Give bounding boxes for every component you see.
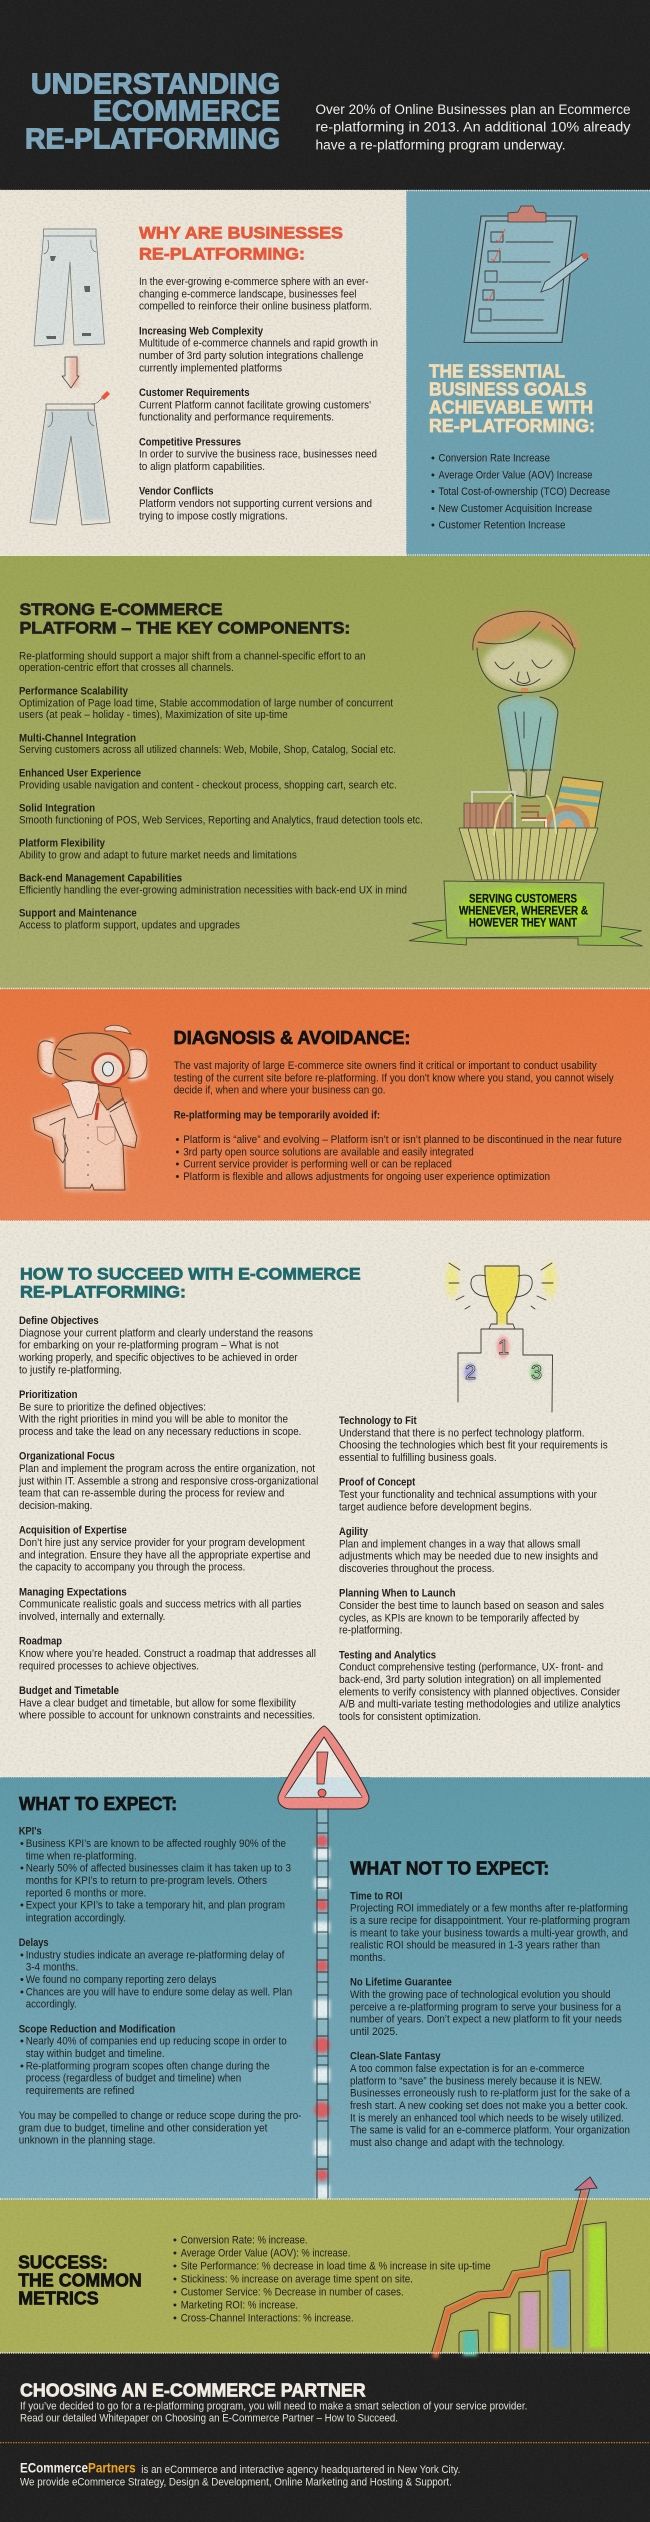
- heading: ACHIEVABLE WITH: [429, 398, 593, 418]
- intro text: re-platforming in 2013. An additional 10% already: [316, 120, 631, 135]
- text block: left column: Prioritization: [19, 1389, 78, 1401]
- text block: right column: essential to fulfilling business goals.: [339, 1452, 497, 1464]
- text block: right column: Technology to Fit: [339, 1415, 417, 1427]
- body: [498, 695, 558, 798]
- heading: [429, 361, 595, 436]
- list: metrics: [173, 2234, 491, 2324]
- text block: right column: Conduct comprehensive testing (performance, UX- front- and: [339, 1662, 603, 1674]
- text block: expectations: unknown in the planning stage.: [19, 2135, 155, 2147]
- text block: company: We provide eCommerce Strategy, Design & Development, Online Marketing and Hosting & Support.: [20, 2476, 452, 2488]
- text block: left column: working properly, and specific objectives to be achieved in order: [18, 1352, 298, 1364]
- basket items: [464, 777, 603, 828]
- icon: clipboard and pencil: [464, 206, 588, 342]
- text block: non-expectations: platform to “save” the business merely because it is NEW.: [350, 2075, 602, 2087]
- banner: [409, 881, 642, 946]
- title: RE-PLATFORMING: [25, 123, 280, 155]
- text block: expectations: •: [20, 1974, 24, 1986]
- text block: expectations: KPI's: [19, 1826, 42, 1838]
- text block: expectations: reported 6 months or more.: [26, 1887, 146, 1899]
- text block: left column: Plan and implement the program across the entire organization, not: [19, 1463, 315, 1475]
- list: business goals: •: [431, 486, 435, 498]
- text block: components: Support and Maintenance: [19, 908, 137, 920]
- text block: expectations: You may be compelled to change or reduce scope during the pro-: [19, 2110, 302, 2122]
- text block: reasons: Increasing Web Complexity: [139, 325, 264, 337]
- text block: components: Back-end Management Capabilities: [19, 873, 182, 885]
- text block: expectations: stay within budget and timeline.: [26, 2048, 165, 2060]
- text block: non-expectations: number of years. Don’t expect a new platform to fit your needs: [350, 2014, 622, 2026]
- text block: partner: If you’ve decided to go for a re-platforming program, you will need to make a smart selection of your service provider.: [20, 2400, 527, 2412]
- text block: left column: Diagnose your current platform and clearly understand the reasons: [19, 1327, 313, 1339]
- text block: diagnosis: decide if, when and where your business can go.: [174, 1085, 386, 1097]
- text block: reasons: Competitive Pressures: [139, 436, 241, 448]
- text block: non-expectations: [350, 1890, 631, 2149]
- text block: company: [20, 2460, 460, 2488]
- list: metrics: •: [173, 2234, 177, 2246]
- text block: right column: Plan and implement changes in a way that allows small: [339, 1538, 580, 1550]
- title: [25, 68, 280, 155]
- text block: expectations: •: [20, 2036, 24, 2048]
- text block: left column: and integration. Ensure they have all the appropriate expertise and: [19, 1549, 310, 1561]
- heading: STRONG E-COMMERCE: [20, 600, 223, 619]
- panel: what to expect: [0, 1777, 650, 2199]
- illustration: professor with magnifier: [33, 1025, 147, 1190]
- panel: header: [0, 0, 650, 190]
- list: business goals: •: [431, 469, 435, 481]
- list: metrics: Conversion Rate: % increase.: [181, 2234, 308, 2246]
- text block: right column: back-end, 3rd party solution integration) on all implemented: [339, 1674, 601, 1686]
- panel: footer: [0, 2353, 650, 2522]
- text block: expectations: •: [20, 1986, 24, 1998]
- list: metrics: •: [173, 2247, 177, 2259]
- text block: right column: Understand that there is no perfect technology platform.: [339, 1427, 584, 1439]
- list: business goals: Customer Retention Increase: [438, 520, 566, 532]
- text block: non-expectations: until 2025.: [350, 2026, 398, 2038]
- text block: expectations: Business KPI’s are known to be affected roughly 90% of the: [26, 1838, 286, 1850]
- text block: partner: Read our detailed Whitepaper on Choosing an E-Commerce Partner – How to Succeed.: [20, 2413, 398, 2425]
- list: metrics: •: [173, 2299, 177, 2311]
- basket: [459, 795, 598, 880]
- panel: how to succeed: [0, 1221, 650, 1777]
- heading: what not to expect: WHAT NOT TO EXPECT:: [350, 1859, 549, 1879]
- text block: components: Solid Integration: [19, 803, 95, 815]
- text block: left column: Define Objectives: [19, 1315, 99, 1327]
- text block: left column: the capacity to accompany you through the process.: [19, 1562, 245, 1574]
- text block: expectations: Industry studies indicate an average re-platforming delay of: [26, 1949, 285, 1961]
- text block: expectations: process (regardless of budget and timeline) when: [26, 2073, 241, 2085]
- heading: CHOOSING AN E-COMMERCE PARTNER: [20, 2381, 366, 2401]
- text block: expectations: Re-platforming program scopes often change during the: [26, 2060, 270, 2072]
- text block: left column: where possible to account for unknown constraints and necessities.: [18, 1710, 315, 1722]
- list: business goals: •: [431, 503, 435, 515]
- list: metrics: Customer Service: % Decrease in number of cases.: [181, 2286, 404, 2298]
- text block: expectations: gram due to budget, timeline and other consideration yet: [19, 2122, 267, 2134]
- heading: RE-PLATFORMING:: [139, 245, 305, 264]
- text block: expectations: requirements are refined: [26, 2085, 134, 2097]
- text block: components: Enhanced User Experience: [19, 768, 141, 780]
- text block: non-expectations: A too common false expectation is for an e-commerce: [350, 2063, 584, 2075]
- text block: expectations: time when re-platforming.: [26, 1850, 137, 1862]
- text block: expectations: 3-4 months.: [26, 1962, 78, 1974]
- heading: [139, 224, 343, 264]
- panel: essential business goals: [406, 190, 650, 556]
- list: metrics: Stickiness: % increase on average time spent on site.: [181, 2273, 413, 2285]
- text block: expectations: Nearly 50% of affected businesses claim it has taken up to 3: [26, 1863, 291, 1875]
- icon: torn jeans: [34, 229, 105, 346]
- text block: reasons: Current Platform cannot facilitate growing customers': [139, 399, 371, 411]
- text block: reasons: In order to survive the business race, businesses need: [139, 449, 377, 461]
- icon: repaired jeans: [30, 391, 110, 525]
- text block: diagnosis: Platform is flexible and allows adjustments for ongoing user experience optimization: [183, 1171, 550, 1183]
- text block: right column: Proof of Concept: [339, 1477, 416, 1489]
- banner: WHENEVER, WHEREVER &: [459, 906, 588, 918]
- text block: non-expectations: No Lifetime Guarantee: [350, 1977, 452, 1989]
- list: metrics: •: [173, 2286, 177, 2298]
- heading: HOW TO SUCCEED WITH E-COMMERCE: [20, 1264, 361, 1283]
- text block: right column: target audience before development begins.: [339, 1501, 532, 1513]
- text block: left column: Organizational Focus: [19, 1451, 115, 1463]
- list: business goals: Total Cost-of-ownership (TCO) Decrease: [438, 486, 610, 498]
- heading: [18, 2252, 142, 2308]
- text block: reasons: trying to impose costly migrations.: [139, 510, 288, 522]
- text block: right column: [339, 1415, 621, 1723]
- text block: left column: Have a clear budget and timetable, but allow for some flexibility: [19, 1697, 296, 1709]
- list: metrics: •: [173, 2273, 177, 2285]
- list: metrics: Average Order Value (AOV): % increase.: [181, 2247, 350, 2259]
- head: [472, 610, 580, 693]
- text block: left column: Know where you’re headed. Construct a roadmap that addresses all: [19, 1648, 316, 1660]
- text block: diagnosis: The vast majority of large E-commerce site owners find it critical or important to conduct usability: [174, 1060, 597, 1072]
- intro text: have a re-platforming program underway.: [316, 137, 566, 152]
- text block: right column: Choosing the technologies which best fit your requirements is: [339, 1440, 608, 1452]
- arrow: torn to fixed jeans: [62, 357, 79, 388]
- text block: expectations: Delays: [19, 1937, 48, 1949]
- list: metrics: •: [173, 2260, 177, 2272]
- text block: components: Providing usable navigation and content - checkout process, shopping cart, search etc.: [19, 779, 397, 791]
- text block: diagnosis: Re-platforming may be temporarily avoided if:: [174, 1109, 380, 1121]
- text block: components: Ability to grow and adapt to future market needs and limitations: [19, 849, 297, 861]
- text block: left column: process and take the lead on any necessary reductions in scope.: [19, 1426, 301, 1438]
- illustration: person with shopping basket: [409, 610, 642, 946]
- text block: non-expectations: Clean-Slate Fantasy: [350, 2051, 441, 2063]
- title: ECOMMERCE: [93, 96, 280, 128]
- text block: right column: adjustments which may be needed due to new insights and: [339, 1551, 598, 1563]
- title: UNDERSTANDING: [31, 68, 280, 100]
- text block: company: Partners: [88, 2460, 136, 2476]
- text block: expectations: •: [20, 1949, 24, 1961]
- heading: SUCCESS:: [18, 2252, 108, 2272]
- text block: expectations: Chances are you will have to endure some delay as well. Plan: [26, 1986, 292, 1998]
- text block: left column: [18, 1315, 318, 1722]
- text block: left column: Don’t hire just any service provider for your program development: [19, 1537, 305, 1549]
- intro text: [316, 102, 631, 152]
- text block: diagnosis: •: [176, 1134, 180, 1146]
- text block: left column: Managing Expectations: [19, 1586, 127, 1598]
- text block: diagnosis: [174, 1060, 622, 1183]
- text block: components: Efficiently handling the ever-growing administration necessities with back-end UX in mind: [19, 884, 407, 896]
- panel: diagnosis and avoidance: [0, 989, 650, 1221]
- panel: success metrics: [0, 2199, 650, 2353]
- text block: expectations: •: [20, 2060, 24, 2072]
- text block: reasons: number of 3rd party solution integrations challenge: [139, 350, 364, 362]
- text block: diagnosis: •: [176, 1146, 180, 1158]
- text block: right column: re-platforming.: [339, 1625, 402, 1637]
- list: metrics: Site Performance: % decrease in load time & % increase in site up-time: [181, 2260, 491, 2272]
- text block: left column: Acquisition of Expertise: [19, 1525, 127, 1537]
- text block: reasons: to align platform capabilities.: [139, 461, 265, 473]
- text block: left column: to justify re-platforming.: [19, 1364, 122, 1376]
- text block: right column: Test your functionality and technical assumptions with your: [339, 1489, 597, 1501]
- text block: components: Platform Flexibility: [19, 838, 106, 850]
- text block: components: Multi-Channel Integration: [19, 732, 136, 744]
- text block: reasons: functionality and performance requirements.: [139, 412, 334, 424]
- heading: THE ESSENTIAL: [429, 361, 565, 381]
- text block: right column: elements to verify consistency with planned objectives. Consider: [339, 1686, 620, 1698]
- heading: THE COMMON: [18, 2270, 142, 2290]
- icon: warning sign on post: [278, 1726, 369, 2199]
- heading: PLATFORM – THE KEY COMPONENTS:: [20, 618, 350, 637]
- text block: expectations: integration accordingly.: [26, 1912, 126, 1924]
- text block: diagnosis: 3rd party open source solutions are available and easily integrated: [183, 1146, 474, 1158]
- text block: diagnosis: •: [176, 1159, 180, 1171]
- text block: components: operation-centric effort that crosses all channels.: [19, 662, 234, 674]
- text block: diagnosis: Current service provider is performing well or can be replaced: [183, 1159, 452, 1171]
- heading: BUSINESS GOALS: [429, 380, 586, 400]
- text block: left column: just within IT. Assemble a strong and responsive cross-organizational: [18, 1475, 318, 1487]
- text block: non-expectations: fresh start. A new cooking set does not make you a better cook.: [350, 2100, 628, 2112]
- text block: left column: With the right priorities in mind you will be able to monitor the: [19, 1414, 288, 1426]
- text block: right column: Consider the best time to launch based on season and sales: [339, 1600, 604, 1612]
- text block: company: ECommerce: [20, 2460, 88, 2476]
- text block: right column: Agility: [339, 1526, 369, 1538]
- list: business goals: •: [431, 452, 435, 464]
- chart: rising bars and arrow: [430, 2177, 608, 2360]
- text block: reasons: Multitude of e-commerce channels and rapid growth in: [139, 338, 378, 350]
- text block: reasons: [139, 276, 378, 522]
- intro text: Over 20% of Online Businesses plan an Ecommerce: [316, 102, 630, 117]
- text block: non-expectations: realistic ROI should be measured in 1-3 years rather than: [350, 1940, 600, 1952]
- text block: left column: involved, internally and externally.: [19, 1611, 165, 1623]
- heading: RE-PLATFORMING:: [20, 1283, 186, 1302]
- text block: reasons: Vendor Conflicts: [139, 486, 214, 498]
- panel: why are businesses re-platforming: [0, 190, 406, 556]
- text block: components: Re-platforming should support a major shift from a channel-specific effort to an: [19, 650, 366, 662]
- text block: right column: Testing and Analytics: [339, 1649, 436, 1661]
- text block: left column: Be sure to prioritize the defined objectives:: [19, 1401, 206, 1413]
- text block: left column: for embarking on your re-platforming program – What is not: [19, 1340, 279, 1352]
- text block: non-expectations: With the growing pace of technological evolution you should: [350, 1989, 611, 2001]
- heading: [20, 1264, 361, 1302]
- panel: key components: [0, 556, 650, 989]
- text block: components: Performance Scalability: [19, 685, 129, 697]
- text block: components: Serving customers across all utilized channels: Web, Mobile, Shop, Catalog, Social etc.: [19, 744, 396, 756]
- illustration: trophy on podium: 1: [498, 1337, 509, 1359]
- text block: reasons: In the ever-growing e-commerce sphere with an ever-: [139, 276, 369, 288]
- text block: expectations: Nearly 40% of companies end up reducing scope in order to: [26, 2036, 287, 2048]
- text block: expectations: Scope Reduction and Modification: [19, 2023, 176, 2035]
- heading: RE-PLATFORMING:: [429, 416, 595, 436]
- text block: right column: Planning When to Launch: [339, 1588, 456, 1600]
- text block: diagnosis: testing of the current site before re-platforming. If you don't know where you stand, you cannot wisely: [174, 1072, 614, 1084]
- heading: METRICS: [18, 2288, 99, 2308]
- text block: left column: Roadmap: [19, 1636, 62, 1648]
- text block: right column: cycles, as KPIs are known to be temporarily affected by: [339, 1612, 579, 1624]
- text block: non-expectations: must also change and adapt with the technology.: [350, 2137, 565, 2149]
- heading: WHAT TO EXPECT:: [19, 1794, 177, 1814]
- text block: expectations: •: [20, 1863, 24, 1875]
- text block: non-expectations: It is merely an enhanced tool which needs to be wisely utilized.: [350, 2112, 624, 2124]
- text block: non-expectations: Time to ROI: [350, 1890, 402, 1902]
- text block: diagnosis: •: [176, 1171, 180, 1183]
- list: business goals: [431, 452, 610, 532]
- text block: components: users (at peak – holiday - times), Maximization of site up-time: [19, 709, 288, 721]
- text block: expectations: •: [20, 1900, 24, 1912]
- text block: left column: Communicate realistic goals and success metrics with all parties: [19, 1599, 302, 1611]
- text block: left column: Budget and Timetable: [19, 1685, 119, 1697]
- list: business goals: Average Order Value (AOV) Increase: [438, 469, 592, 481]
- text block: components: Optimization of Page load time, Stable accommodation of large number of concurrent: [19, 697, 393, 709]
- text block: components: [19, 650, 423, 932]
- text block: expectations: months for KPI’s to return to pre-program levels. Others: [26, 1875, 267, 1887]
- banner: SERVING CUSTOMERS: [469, 894, 577, 906]
- list: business goals: Conversion Rate Increase: [438, 452, 550, 464]
- heading: [20, 600, 350, 637]
- list: metrics: Marketing ROI: % increase.: [181, 2299, 298, 2311]
- text block: right column: A/B and multi-variate testing methodologies and utilize analytics: [339, 1699, 621, 1711]
- text block: partner: [20, 2400, 527, 2425]
- text block: expectations: We found no company reporting zero delays: [26, 1974, 217, 1986]
- text block: non-expectations: perceive a re-platforming program to serve your business for a: [350, 2001, 622, 2013]
- text block: left column: decision-making.: [19, 1500, 92, 1512]
- text block: expectations: Expect your KPI’s to take a temporary hit, and plan program: [26, 1900, 285, 1912]
- text block: reasons: compelled to reinforce their online business platform.: [139, 300, 372, 312]
- text block: reasons: Customer Requirements: [139, 387, 250, 399]
- illustration: trophy on podium: 2: [465, 1362, 476, 1384]
- text block: expectations: •: [20, 1838, 24, 1850]
- banner: HOWEVER THEY WANT: [469, 917, 577, 929]
- text block: right column: discoveries throughout the process.: [339, 1563, 494, 1575]
- list: metrics: •: [173, 2312, 177, 2324]
- text block: expectations: [19, 1826, 302, 2147]
- text block: left column: required processes to achieve objectives.: [19, 1660, 199, 1672]
- text block: non-expectations: months.: [350, 1952, 386, 1964]
- illustration: trophy on podium: [446, 1262, 556, 1412]
- text block: reasons: currently implemented platforms: [139, 362, 282, 374]
- text block: reasons: Platform vendors not supporting current versions and: [139, 498, 372, 510]
- text block: reasons: changing e-commerce landscape, businesses feel: [139, 288, 356, 300]
- text block: company: is an eCommerce and interactive agency headquartered in New York City.: [141, 2464, 460, 2476]
- text block: components: Access to platform support, updates and upgrades: [19, 920, 240, 932]
- text block: expectations: accordingly.: [26, 1999, 77, 2011]
- text block: right column: tools for consistent optimization.: [339, 1711, 481, 1723]
- list: metrics: Cross-Channel Interactions: % increase.: [181, 2312, 354, 2324]
- list: business goals: •: [431, 520, 435, 532]
- illustration: trophy on podium: 3: [531, 1362, 542, 1384]
- text block: left column: team that can re-assemble during the process for review and: [19, 1488, 284, 1500]
- heading: DIAGNOSIS & AVOIDANCE:: [174, 1028, 410, 1048]
- heading: WHY ARE BUSINESSES: [139, 224, 343, 243]
- text block: components: Smooth functioning of POS, Web Services, Reporting and Analytics, fraud detection tools etc.: [19, 814, 423, 826]
- list: business goals: New Customer Acquisition Increase: [438, 503, 592, 515]
